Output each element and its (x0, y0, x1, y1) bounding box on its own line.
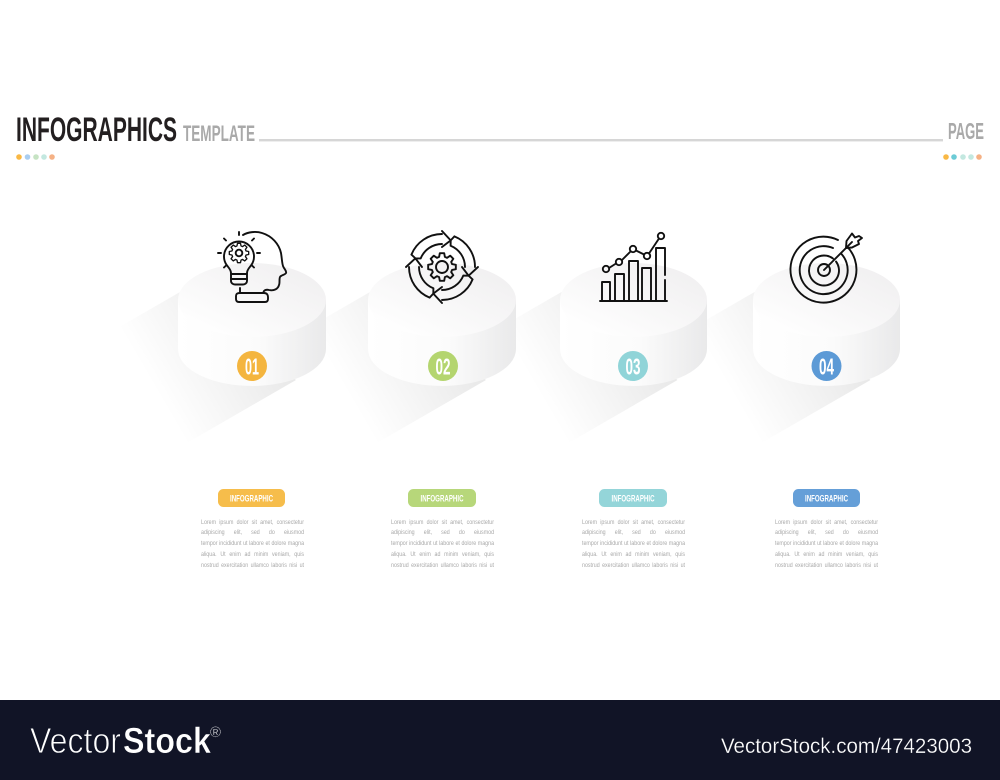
icon: gear with cycle arrows (406, 231, 478, 303)
number badge 02: 02 (436, 354, 450, 380)
footer logo: Vector (30, 720, 121, 761)
label pill 1 (218, 489, 285, 507)
text block 2: adipiscing elit, sed do eiusmod (391, 529, 494, 536)
text block 3: nostrud exercitation ullamco laboris nisi ut (582, 562, 685, 569)
number badge 03: 03 (626, 354, 640, 380)
text block 1: Lorem ipsum dolor sit amet, consectetur (201, 518, 304, 526)
text block 4: nostrud exercitation ullamco laboris nisi ut (775, 562, 878, 569)
number badge 01 (237, 351, 267, 381)
cylinder 3 (560, 263, 707, 386)
text block 2: Lorem ipsum dolor sit amet, consectetur (391, 518, 494, 526)
number badge 03 (618, 351, 648, 381)
label pill 1: INFOGRAPHIC (230, 494, 273, 504)
cylinder shadows (64, 292, 870, 447)
text block 2: tempor incididunt ut labore et dolore magna (391, 540, 494, 547)
text block 3: tempor incididunt ut labore et dolore magna (582, 540, 685, 547)
title: INFOGRAPHICS (16, 111, 177, 149)
text block 4: adipiscing elit, sed do eiusmod (775, 529, 878, 536)
footer logo: ® (210, 724, 221, 741)
text block 2: nostrud exercitation ullamco laboris nisi ut (391, 562, 494, 569)
footer logo (30, 720, 221, 761)
text block 3: Lorem ipsum dolor sit amet, consectetur (582, 518, 685, 526)
cylinder 4 (753, 263, 900, 386)
number badge 04 (812, 351, 842, 381)
label pill 4 (793, 489, 860, 507)
footer image id: VectorStock.com/47423003 (721, 735, 972, 758)
text block 2: aliqua. Ut enim ad minim veniam, quis (391, 551, 494, 558)
label pill 2: INFOGRAPHIC (420, 494, 464, 504)
text block 4: tempor incididunt ut labore et dolore magna (775, 540, 878, 547)
dots: left (16, 154, 55, 160)
cylinder 1 (178, 263, 326, 386)
icon: target with arrow (790, 234, 862, 303)
text block 1: nostrud exercitation ullamco laboris nisi ut (201, 562, 304, 569)
cylinder 2 (368, 263, 516, 386)
text block 1: tempor incididunt ut labore et dolore magna (201, 540, 304, 547)
text block 1: adipiscing elit, sed do eiusmod (201, 529, 304, 536)
text block 1: aliqua. Ut enim ad minim veniam, quis (201, 551, 304, 558)
footer band (0, 700, 1000, 780)
text block 4: Lorem ipsum dolor sit amet, consectetur (775, 518, 878, 526)
text block 4 (775, 518, 878, 569)
text block 3 (582, 518, 685, 569)
footer logo: Stock (123, 720, 212, 761)
number badge 02 (428, 351, 458, 381)
text block 3: aliqua. Ut enim ad minim veniam, quis (582, 551, 685, 558)
label pill 3 (599, 489, 667, 507)
number badge 01: 01 (245, 354, 259, 380)
text block 4: aliqua. Ut enim ad minim veniam, quis (775, 551, 878, 558)
title: TEMPLATE (183, 121, 255, 146)
label pill 3: INFOGRAPHIC (612, 494, 655, 504)
dots: right (943, 154, 982, 160)
text block 1 (201, 518, 304, 569)
text block 3: adipiscing elit, sed do eiusmod (582, 529, 685, 536)
text block 2 (391, 518, 494, 569)
label pill 2 (408, 489, 476, 507)
label pill 4: INFOGRAPHIC (805, 494, 848, 504)
icon: bar chart with trend line (600, 233, 667, 301)
number badge 04: 04 (819, 354, 834, 380)
icon: head with lightbulb (218, 232, 286, 302)
